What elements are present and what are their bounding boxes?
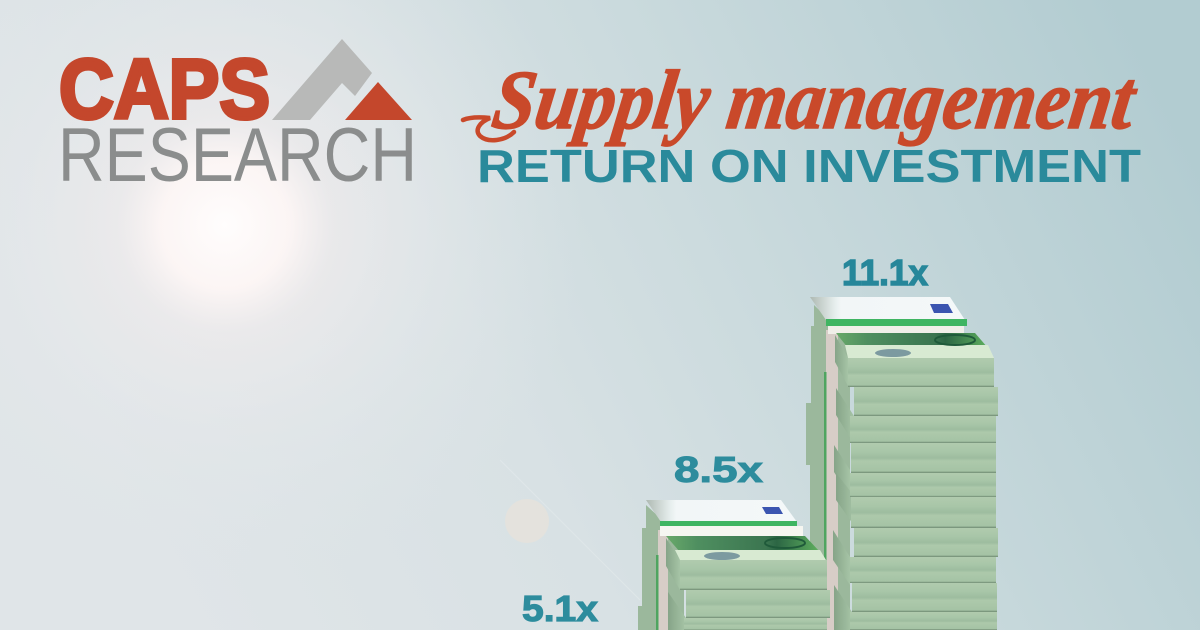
euro note face [666, 536, 820, 552]
stack left side [806, 305, 855, 630]
logo word: CAPS: CAPS [59, 42, 270, 136]
value label 11.1x: 11.1x [842, 252, 928, 293]
top banknote [810, 297, 965, 320]
paper band [660, 521, 797, 526]
euro note face [836, 333, 988, 348]
value label 8.5x: 8.5x [674, 449, 763, 490]
title script line: Supply management [487, 54, 1143, 147]
paper band [826, 319, 967, 326]
title [463, 54, 1143, 192]
logo: CAPS Research [58, 39, 417, 198]
logo word: RESEARCH: RESEARCH [58, 113, 417, 198]
logo icon: grey peak [272, 39, 372, 120]
logo icon: red triangle [345, 82, 412, 120]
top banknote [646, 500, 797, 522]
stacked bricks [848, 358, 998, 630]
stack left side [638, 505, 686, 630]
value label 5.1x: 5.1x [522, 588, 598, 629]
money stack: 11.1x [806, 297, 998, 630]
stacked bricks [680, 560, 830, 630]
lens flare circle [505, 499, 549, 543]
title bold line: RETURN ON INVESTMENT [477, 140, 1141, 192]
money stack: 8.5x [638, 500, 830, 630]
